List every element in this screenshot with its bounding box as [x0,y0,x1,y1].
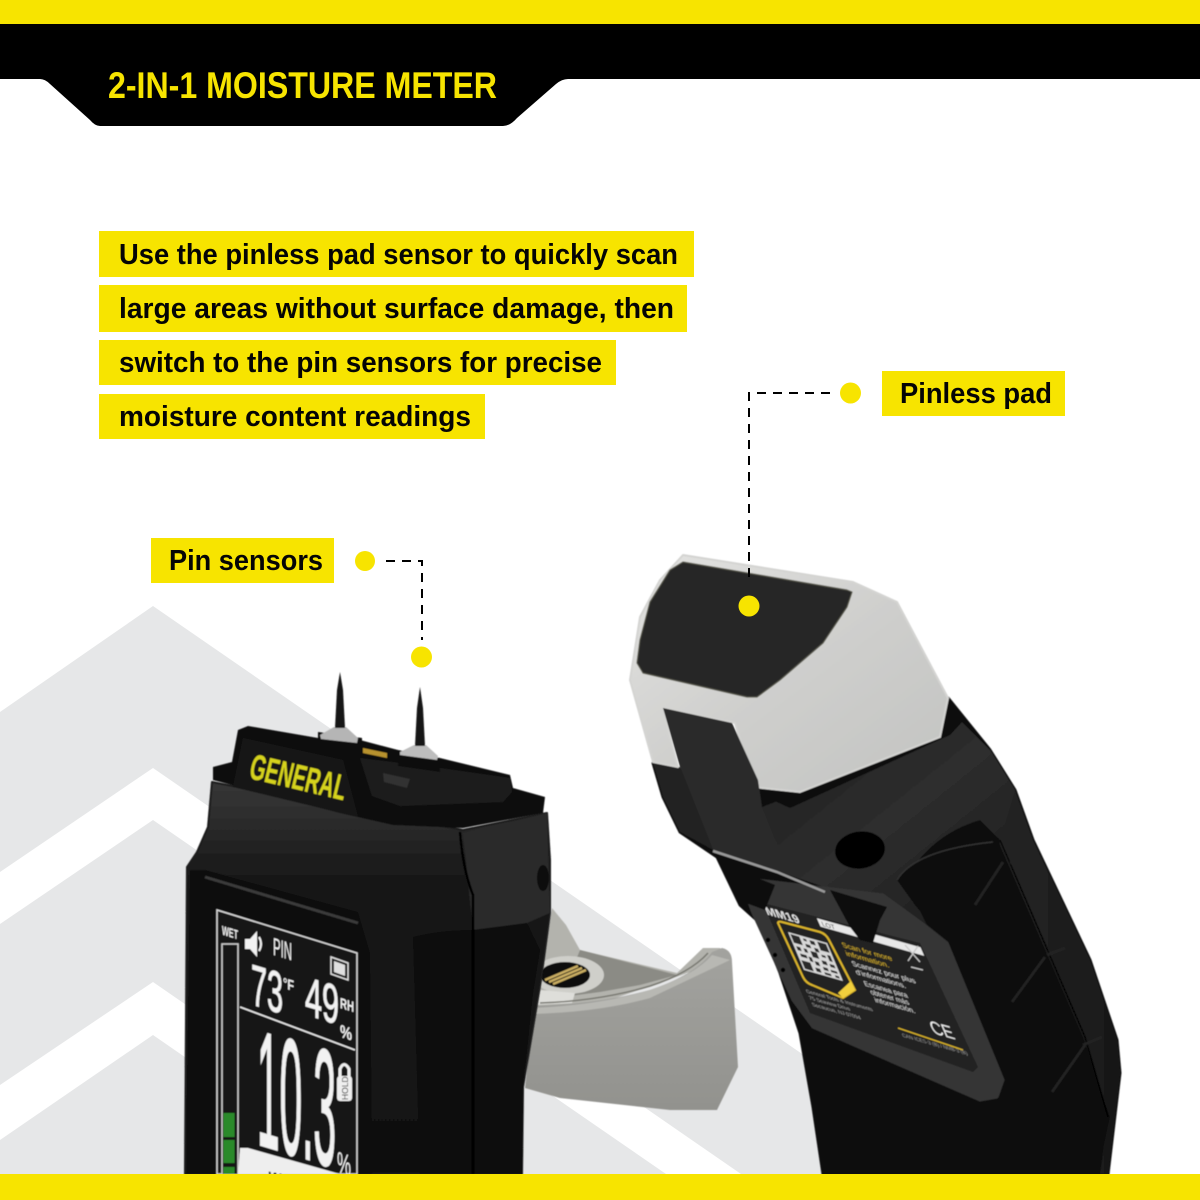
level bars [224,1113,234,1174]
logo: GENERAL [246,746,351,808]
title: 2-IN-1 MOISTURE METER [108,65,497,106]
screw hole [833,828,887,872]
display: PIN [273,933,292,966]
mode tag: WOOD [266,1168,314,1192]
label text: 75 Seaview Drive [808,996,852,1013]
hold icon [337,1064,352,1101]
top band [0,0,1200,126]
pinless pad [637,562,852,697]
display: % [340,1020,352,1045]
top cap with logo [213,726,545,828]
label text: LOT [820,920,837,932]
description text block: switch to the pin sensors for precise [119,347,602,379]
rubber seal [758,698,962,808]
black brackets [725,865,775,910]
QR code [778,922,855,998]
label text: MM19 [762,903,802,927]
right meter: pinless side [630,555,1120,1174]
strap behind left meter [525,908,738,1110]
velcro band [663,708,783,872]
description text block: moisture content readings [119,401,471,433]
background chevrons [0,606,976,1174]
display: RH [340,995,354,1016]
callout: pinless pad: Pinless pad [900,378,1052,410]
label text: información. [873,996,917,1015]
mode tag [238,1148,340,1192]
side port [537,865,549,891]
side rim [990,750,1120,1174]
display [217,910,357,1200]
label text: General Tools & Instruments [805,989,874,1013]
left lower cap body [653,763,713,850]
label text: Escanea para [862,979,910,1000]
grey sensor cap [630,555,948,792]
strap inner surface [530,908,730,1010]
label text: obtener más [869,988,911,1007]
highlight seam [713,851,825,892]
description text block: Use the pinless pad sensor to quickly scan [119,239,678,271]
shoulder [762,722,1015,925]
label text: CAN ICES-3 (B) / NMB-3 (B) [901,1033,969,1057]
label text: Scannez pour plus [850,959,917,985]
callout: pin sensors: Pin sensors [169,545,323,577]
speaker icon [245,931,257,957]
connector [532,956,604,994]
display: 49 [305,965,339,1036]
description text block: large areas without surface damage, then [119,293,674,325]
label text: CE [926,1017,958,1044]
display: 73 [251,951,283,1027]
metal pins [318,672,440,772]
hold icon: HOLD [340,1076,350,1100]
callout: pin sensors [151,538,432,668]
left meter: pin side [185,672,550,1200]
strap front face [525,948,738,1110]
meter body [185,782,550,1174]
bottom band [0,1174,1200,1200]
label text [762,903,969,1057]
label text: information. [844,949,891,970]
meter body silhouette [653,698,1120,1174]
display: °F [283,975,294,995]
callout: pinless pad [738,371,1065,616]
battery icon [331,957,348,980]
label text: Scan for more [840,941,894,963]
grip ribs [975,857,1102,1092]
label text: Secaucus, NJ 07094 [811,1002,862,1022]
label plate [740,878,1003,1100]
screen bezel [186,870,372,1174]
description text block [99,231,694,439]
display: % [337,1146,351,1183]
label text: d'informations. [854,968,907,990]
side grip recess [815,842,1108,1174]
display: WET [222,923,238,942]
